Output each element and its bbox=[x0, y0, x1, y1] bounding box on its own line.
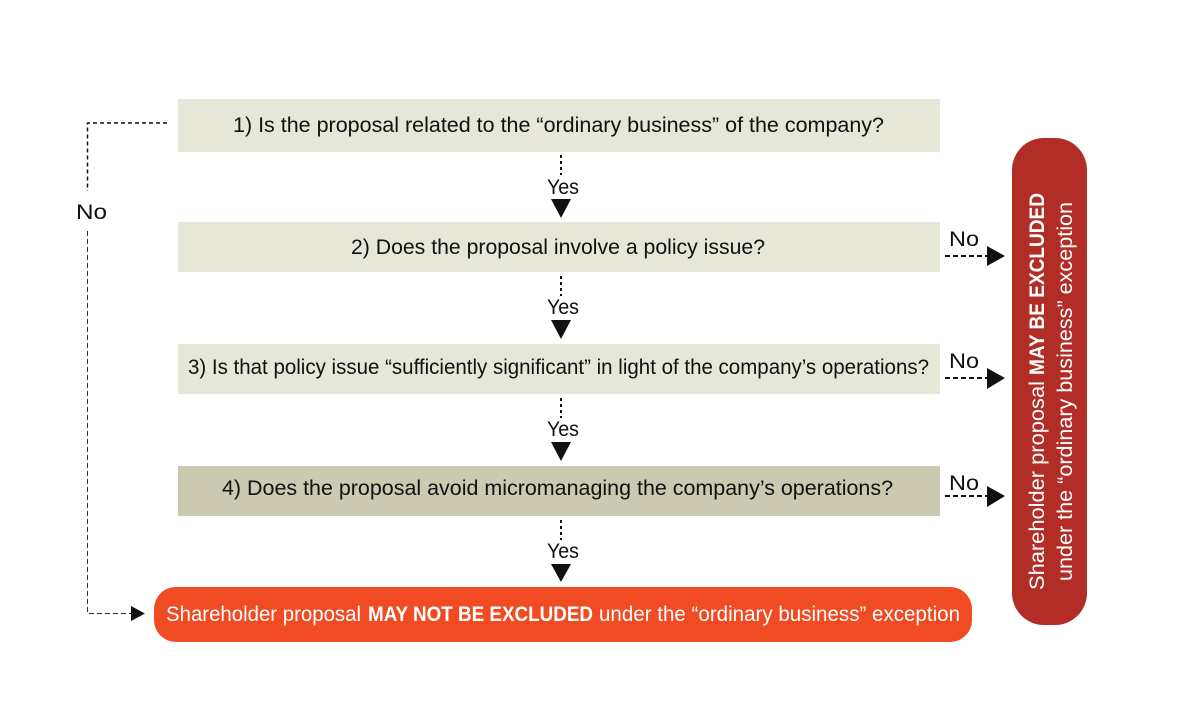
outcome: may not be excluded bbox=[154, 587, 972, 642]
outcome: may not be excluded: under the “ordinary business” exception bbox=[599, 603, 960, 626]
outcome: may not be excluded: Shareholder proposal bbox=[166, 603, 361, 626]
question 3 box bbox=[178, 344, 940, 394]
arrow: question 4 yes: Yes bbox=[547, 540, 579, 563]
question 2 box bbox=[178, 222, 940, 272]
outcome: may be excluded bbox=[1012, 138, 1087, 625]
arrow: question 1 yes bbox=[547, 155, 579, 218]
arrow: question 1 yes: Yes bbox=[547, 176, 579, 199]
arrow: question 2 no: No bbox=[949, 228, 979, 251]
arrow: question 3 no: No bbox=[949, 350, 979, 373]
outcome: may be excluded: MAY BE EXCLUDED bbox=[1026, 193, 1049, 375]
outcome: may be excluded: Shareholder proposal bbox=[1026, 381, 1049, 590]
arrow: question 1 no, to not excluded outcome: No bbox=[76, 201, 107, 224]
arrow: question 3 no bbox=[945, 350, 1005, 389]
arrow: question 3 yes bbox=[547, 398, 579, 461]
question 4 box bbox=[178, 466, 940, 516]
arrow: question 2 yes: Yes bbox=[547, 296, 579, 319]
arrow: question 4 no: No bbox=[949, 472, 979, 495]
arrow: question 4 no bbox=[945, 472, 1005, 507]
arrow: question 4 yes bbox=[547, 520, 579, 582]
arrow: question 3 yes: Yes bbox=[547, 418, 579, 441]
question 2 box: 2) Does the proposal involve a policy issue? bbox=[351, 236, 765, 259]
arrow: question 2 no bbox=[945, 228, 1005, 266]
outcome: may not be excluded: MAY NOT BE EXCLUDED bbox=[368, 603, 593, 626]
outcome: may be excluded: under the “ordinary business” exception bbox=[1054, 202, 1077, 581]
question 3 box: 3) Is that policy issue “sufficiently significant” in light of the company’s operations? bbox=[188, 356, 929, 379]
question 4 box: 4) Does the proposal avoid micromanaging the company’s operations? bbox=[222, 477, 893, 500]
question 1 box bbox=[178, 99, 940, 152]
arrow: question 1 no, to not excluded outcome bbox=[76, 123, 167, 621]
question 1 box: 1) Is the proposal related to the “ordinary business” of the company? bbox=[233, 114, 884, 137]
arrow: question 2 yes bbox=[547, 276, 579, 339]
